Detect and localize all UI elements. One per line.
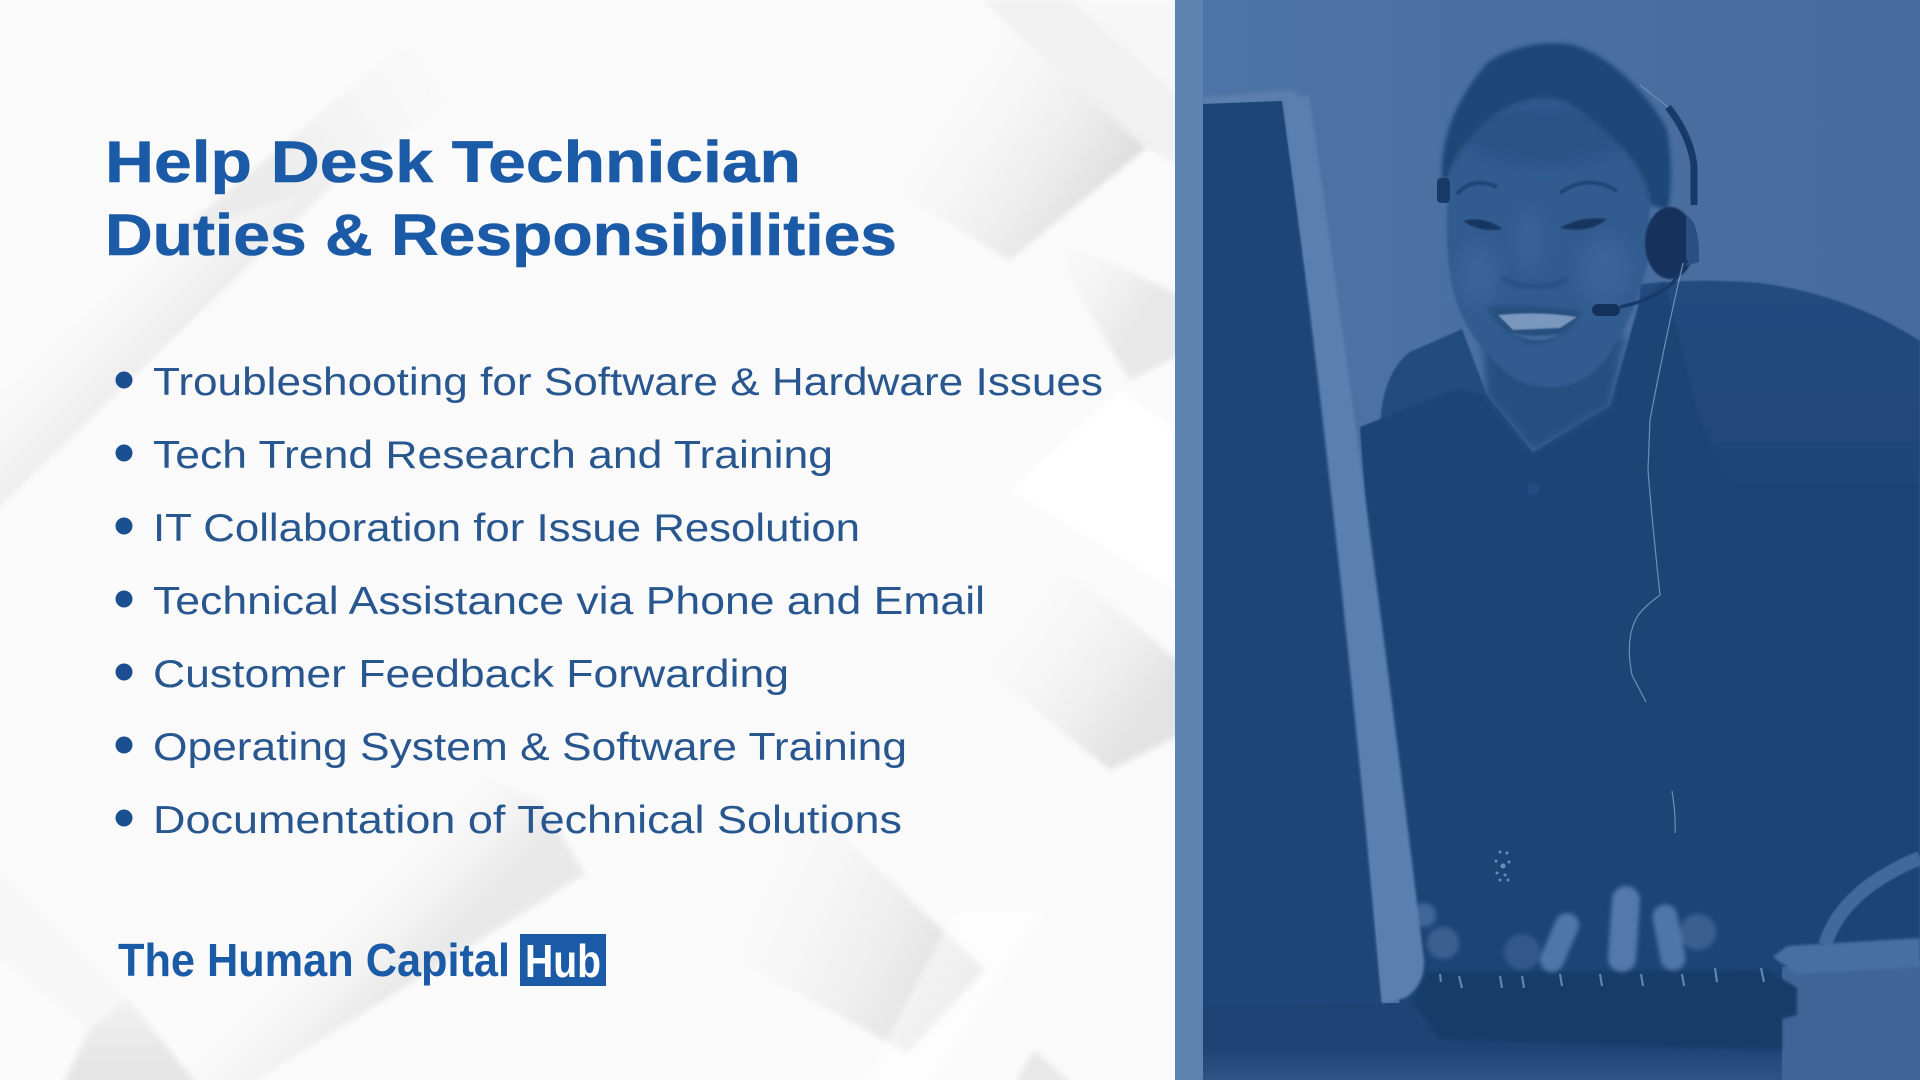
desk and lower area bbox=[1203, 1003, 1803, 1080]
nose bbox=[1503, 277, 1567, 287]
photo side strip bbox=[1175, 0, 1203, 1080]
eyebrows bbox=[1457, 183, 1497, 194]
title: Help Desk Technician bbox=[105, 130, 801, 195]
hair bbox=[1442, 43, 1671, 210]
eyes bbox=[1463, 219, 1503, 230]
monitor bbox=[1203, 90, 1424, 1006]
neck bbox=[1483, 335, 1625, 452]
face bbox=[1442, 43, 1671, 387]
duty 4: Technical Assistance via Phone and Email bbox=[153, 580, 985, 623]
wristwatch detail bbox=[1494, 850, 1510, 882]
jacket and shirt bbox=[1360, 282, 1850, 1010]
jacket button bbox=[1527, 483, 1539, 495]
desk surface bbox=[1773, 938, 1920, 1080]
mouth bbox=[1487, 306, 1582, 345]
duty 6: Operating System & Software Training bbox=[153, 726, 907, 769]
duty 2: Tech Trend Research and Training bbox=[153, 434, 833, 477]
chair arm bbox=[1825, 858, 1920, 945]
forehead shade bbox=[1460, 105, 1630, 165]
panel: duotone photo of technician at computer bbox=[1175, 0, 1920, 1080]
hands on keyboard bbox=[1412, 900, 1716, 970]
duty 7: Documentation of Technical Solutions bbox=[153, 799, 902, 842]
duty 3: IT Collaboration for Issue Resolution bbox=[153, 507, 860, 550]
panel: geometric white background bbox=[0, 0, 1190, 1080]
title: Duties & Responsibilities bbox=[105, 203, 897, 268]
bullet list of duties bbox=[116, 361, 1103, 842]
logo: The Human Capital Hub: The Human Capital bbox=[118, 934, 510, 986]
cheek highlights bbox=[1458, 245, 1498, 305]
duty 1: Troubleshooting for Software & Hardware Issues bbox=[153, 361, 1103, 404]
headset cable bbox=[1629, 263, 1683, 833]
headset bbox=[1437, 85, 1699, 316]
photo backdrop bbox=[1203, 0, 1920, 1080]
logo: The Human Capital Hub: Hub bbox=[525, 935, 601, 987]
title bbox=[105, 130, 897, 268]
keyboard bbox=[1412, 968, 1797, 1050]
chair bbox=[1380, 281, 1920, 1080]
duty 5: Customer Feedback Forwarding bbox=[153, 653, 789, 696]
